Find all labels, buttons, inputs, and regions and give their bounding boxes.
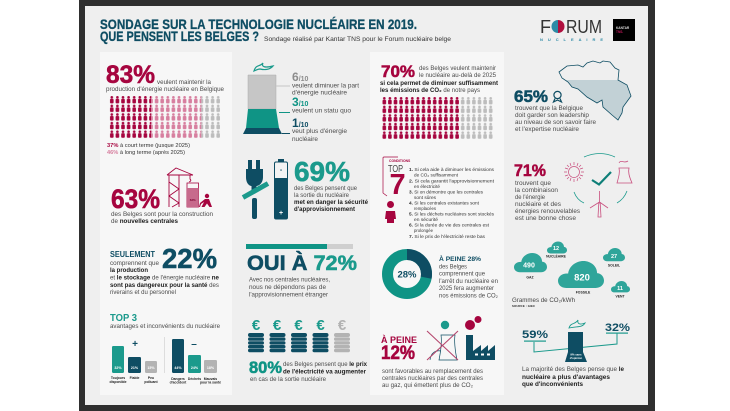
- subtitle: Sondage réalisé par Kantar TNS pour le Forum nucléaire belge: [264, 37, 452, 43]
- stat 32%: 32%: [605, 322, 630, 334]
- description: [294, 186, 369, 213]
- bar chart: drawbacks: Mauvais: [204, 377, 217, 381]
- icon: euro signs: €: [273, 317, 282, 334]
- list of conditions: remplacées: [414, 206, 437, 211]
- description: d'approvisionnement: [294, 207, 355, 213]
- list of conditions: [409, 167, 495, 239]
- description: centrales nucléaires par des centrales: [382, 376, 483, 382]
- bar chart: drawbacks: 18%: [207, 366, 215, 370]
- description: [111, 212, 213, 225]
- text 6/10: [292, 70, 359, 96]
- bar chart: advantages: Toujours: [111, 376, 125, 380]
- description: [439, 256, 499, 300]
- icon: plug: [243, 160, 268, 219]
- icon: euro signs: [252, 317, 347, 334]
- tower 9% sans opinion: [565, 332, 587, 362]
- list of conditions: 4. Si les centrales existantes sont: [409, 200, 480, 206]
- icon: coin stacks: [248, 333, 350, 352]
- description: nucléaire et des: [515, 202, 561, 208]
- bar chart: drawbacks: [170, 339, 221, 384]
- description: des Belges veulent maintenir: [419, 66, 496, 72]
- icon: euro signs: €: [338, 317, 347, 334]
- panel: 65% Belgian leadership: [514, 61, 631, 133]
- description: des Belges: [439, 264, 467, 270]
- cloud caption: Grammes de CO₂/kWh: [512, 298, 575, 304]
- description: des Belges sont pour la construction: [111, 212, 213, 218]
- stat 59%: 59%: [522, 329, 548, 341]
- description: des Belges pensent que le prix: [283, 362, 368, 368]
- icon: worker: [199, 194, 212, 207]
- description: À PEINE 28%: [439, 256, 482, 263]
- list of conditions: en sécurité: [414, 217, 438, 222]
- stat 12%: À PEINE: [381, 335, 417, 346]
- chart: cooling tower split: [243, 75, 282, 134]
- description: nous ne dépendons pas de: [249, 285, 327, 291]
- description: et le stockage de l'énergie nucléaire ne: [110, 276, 220, 282]
- text 3/10: [292, 95, 352, 114]
- heading seulement: SEULEMENT: [110, 250, 155, 259]
- bracket and heading: [383, 157, 411, 201]
- tower 9% sans opinion: 9% sans: [570, 352, 582, 356]
- panel: 70% beyond 2025: [380, 62, 498, 140]
- stat 12%: [381, 335, 417, 364]
- stat description: veulent maintenir la: [157, 80, 212, 86]
- list of conditions: 7. Si le prix de l'électricité reste bas: [409, 234, 486, 239]
- list of conditions: de CO₂ suffisamment: [414, 172, 459, 178]
- description: les émissions de CO₂ de notre pays: [380, 88, 480, 94]
- text 3/10: veulent un statu quo: [292, 108, 352, 114]
- description: que d'inconvénients: [522, 382, 584, 388]
- cloud wind 11: [611, 281, 630, 298]
- bar chart: advantages: polluant: [144, 380, 158, 384]
- description: au niveau de son savoir faire: [515, 120, 597, 126]
- text 1/10: [292, 116, 348, 143]
- bar chart: advantages: disponible: [110, 380, 127, 384]
- description: le nucléaire au-delà de 2025: [419, 73, 497, 79]
- description: au gaz, qui émettent plus de CO₂: [382, 383, 474, 389]
- list of conditions: 5. Si les déchets nucléaires sont stockés: [409, 212, 495, 216]
- cloud fossil 820: 820: [574, 272, 590, 284]
- panel: top 3: [110, 313, 221, 384]
- cloud nuclear 12: NUCLÉAIRE: [546, 254, 567, 258]
- sheet background: [85, 6, 648, 405]
- description: sont pas dangereux pour la santé des: [110, 283, 219, 289]
- bar chart: advantages: Fiable: [130, 376, 140, 380]
- description: met en danger la sécurité: [294, 200, 369, 206]
- description: trouvent que: [515, 181, 552, 187]
- description: [382, 369, 483, 389]
- tower 9% sans opinion: d'opinion: [570, 356, 583, 360]
- description: [250, 362, 368, 383]
- description: [515, 181, 580, 222]
- cloud gas 490: [514, 253, 547, 280]
- description: riverains et du personnel: [110, 290, 176, 296]
- icon: battery: +: [279, 210, 283, 217]
- description: sont favorables au remplacement des: [382, 369, 483, 375]
- description: la combinaison: [515, 188, 558, 194]
- icon: smoke: [569, 320, 585, 328]
- legend short and long term: [107, 143, 190, 156]
- stat 69%: 69%: [294, 156, 350, 187]
- stat description: production d'énergie nucléaire en Belgique: [106, 87, 225, 93]
- text 3/10: 3/10: [292, 95, 309, 109]
- logo: Forum Nucléaire: RUM: [566, 17, 602, 37]
- description: La majorité des Belges pense que le: [522, 367, 625, 373]
- description: si cela permet de diminuer suffisamment: [380, 81, 498, 87]
- list of conditions: 1. Si cela aide à diminuer les émissions: [409, 167, 495, 172]
- icon: factory: [465, 316, 495, 360]
- bar chart: advantages: 32%: [114, 366, 122, 370]
- cloud gas 490: GAZ: [526, 276, 534, 280]
- description: de nouvelles centrales: [111, 219, 179, 225]
- list of conditions: prolongée: [414, 228, 433, 233]
- panel: 22% safety: [110, 243, 220, 296]
- cloud nuclear 12: 12: [553, 246, 559, 252]
- list of conditions: 6. Si la durée de vie des centrales est: [409, 222, 490, 228]
- list of conditions: 3. Si on démontre que les centrales: [409, 190, 484, 194]
- icon: smoke: [254, 63, 273, 71]
- cloud caption: [512, 298, 575, 308]
- description: la production: [110, 268, 148, 274]
- icon: euro signs: €: [294, 317, 303, 334]
- stat 22%: 22%: [162, 243, 217, 274]
- description: en cas de la sortie nucléaire: [250, 377, 327, 383]
- icon: euro signs: €: [316, 317, 325, 334]
- cloud caption: SOURCE : GIEC: [512, 304, 535, 308]
- stat 63%: 63%: [111, 184, 160, 214]
- people pictogram 83%: [109, 96, 220, 139]
- panel: balance 59% vs 32%: [522, 320, 630, 388]
- map of Belgium: [559, 61, 631, 120]
- balance beam: [534, 333, 617, 352]
- icon: person: [385, 201, 396, 223]
- bar chart: drawbacks: Dangers: [171, 377, 185, 381]
- description: est une bonne chose: [515, 216, 577, 222]
- description: des Belges pensent que: [294, 186, 358, 192]
- description: de l'énergie: [515, 195, 546, 201]
- icon: battery: [274, 159, 288, 219]
- text 1/10: veut plus d'énergie: [292, 129, 348, 135]
- cloud wind 11: 11: [617, 286, 623, 292]
- description: l'arrêt du nucléaire en: [439, 279, 498, 285]
- description: [110, 261, 220, 296]
- cloud fossil 820: [558, 261, 604, 294]
- icon: battery: -: [280, 167, 283, 174]
- panel: 69% security of supply: [243, 156, 369, 219]
- title: SONDAGE SUR LA TECHNOLOGIE NUCLÉAIRE EN 2019.: [100, 16, 417, 32]
- text 6/10: d'énergie nucléaire: [292, 90, 348, 96]
- stat 65%: 65%: [514, 87, 548, 106]
- description: comprennent que: [110, 261, 160, 267]
- donut chart: 28%: [397, 270, 417, 280]
- bar chart: drawbacks: 24%: [191, 366, 199, 370]
- bar chart: advantages: 21%: [131, 366, 139, 370]
- icon: euro signs: €: [252, 317, 261, 334]
- panel: 63% new plants: [111, 168, 213, 225]
- bar chart: drawbacks: 44%: [174, 366, 182, 370]
- cloud nuclear 12: [546, 242, 567, 258]
- text 6/10: veulent diminuer la part: [292, 84, 359, 90]
- bar chart: drawbacks: –: [191, 339, 197, 350]
- description: nucléaire a plus d'avantages: [522, 375, 611, 381]
- cloud solar 27: 27: [611, 254, 617, 260]
- description: et l'expertise nucléaire: [515, 127, 580, 133]
- stat 70%: 70%: [381, 62, 415, 81]
- description: nos émissions de CO₂: [439, 294, 499, 300]
- heading oui à 72%: OUI À 72%: [247, 252, 357, 275]
- cloud solar 27: [603, 248, 625, 268]
- stat 80%: 80%: [249, 358, 282, 377]
- cloud gas 490: 490: [523, 262, 535, 270]
- description: [249, 278, 330, 298]
- subheading: avantages et inconvénients du nucléaire: [110, 324, 221, 330]
- icon: rosette: [554, 91, 562, 102]
- left column panel: [100, 52, 232, 395]
- description: énergies renouvelables: [515, 209, 580, 215]
- bar chart: drawbacks: d'accident: [170, 380, 187, 384]
- stat 83%: 83%: [106, 61, 155, 89]
- icon: crane: [167, 168, 193, 207]
- bar chart: advantages: [110, 339, 158, 384]
- people pictogram 70%: [382, 97, 494, 140]
- cloud fossil 820: FOSSILE: [576, 290, 591, 294]
- icon: pink tower: [617, 161, 632, 183]
- infographic page: [79, 0, 655, 411]
- logo: Kantar TNS: [613, 19, 635, 41]
- list of conditions: en électricité: [414, 184, 440, 189]
- panel: cooling tower 6/10 3/10 1/10: [243, 63, 359, 143]
- panel: top 7 conditions: [383, 157, 495, 239]
- panel: 83% maintain nuclear: [106, 61, 225, 156]
- description: trouvent que la Belgique: [515, 106, 584, 112]
- description: l'approvisionnement étranger: [249, 292, 328, 298]
- bar chart: advantages: +: [132, 339, 138, 350]
- heading: TOP 3: [110, 313, 137, 324]
- description: [515, 106, 597, 133]
- text 1/10: nucléaire: [292, 137, 319, 143]
- logo: Forum Nucléaire: NUCLEAIRE: [540, 37, 603, 42]
- bar chart: drawbacks: Déchets: [188, 377, 201, 381]
- stat description: [106, 80, 225, 93]
- description: la sortie du nucléaire: [294, 193, 350, 199]
- text 1/10: 1/10: [292, 116, 309, 130]
- bracket and heading: CONDITIONS: [389, 159, 411, 163]
- legend short and long term: 37% à court terme (jusque 2025): [107, 143, 190, 149]
- bracket and heading: 7: [390, 169, 406, 201]
- icon: crossed cooling tower: [427, 321, 458, 360]
- bar chart: advantages: 15%: [147, 366, 155, 370]
- bar chart: advantages: Peu: [148, 376, 154, 380]
- icon: circle arcs and check: [574, 154, 627, 203]
- description: de l'électricité va augmenter: [283, 370, 367, 376]
- bar chart: drawbacks: pour la santé: [200, 380, 221, 384]
- third column panel: [370, 52, 504, 395]
- description: Avec nos centrales nucléaires,: [249, 278, 330, 284]
- logo: Kantar TNS: KANTAR: [616, 26, 630, 30]
- cloud wind 11: VENT: [615, 294, 625, 298]
- cloud solar 27: SOLEIL: [608, 264, 620, 268]
- bracket and heading: TOP: [388, 163, 403, 175]
- list of conditions: 2. Si cela garantit l'approvisionnement: [409, 178, 495, 184]
- list of conditions: sont sûres: [414, 195, 437, 200]
- logo: Kantar TNS: TNS.: [616, 30, 623, 34]
- stat 71%: 71%: [514, 161, 546, 180]
- icon: silo 63%: 63%: [190, 198, 196, 202]
- icon: sun: [564, 162, 584, 182]
- description: doit garder son leadership: [515, 113, 590, 119]
- description: [522, 367, 625, 388]
- legend short and long term: 46% à long terme (après 2025): [107, 150, 185, 156]
- panel: 28% donut: [388, 254, 499, 300]
- panel: CO2 clouds: [512, 242, 630, 308]
- description: [380, 66, 498, 94]
- stat 12%: 12%: [381, 343, 415, 364]
- panel: oui à 72%: [246, 244, 357, 298]
- panel: 71% energy mix: [514, 154, 632, 222]
- logo: Forum Nucléaire: [540, 17, 603, 42]
- description: 2025 fera augmenter: [439, 286, 494, 292]
- title: QUE PENSENT LES BELGES ?: [100, 28, 259, 44]
- progress bar: [246, 244, 353, 249]
- description: comprennent que: [439, 272, 486, 278]
- panel: 80% electricity price: [248, 317, 368, 383]
- logo: Forum Nucléaire: F: [540, 17, 551, 37]
- icon: wind turbine: [590, 191, 608, 217]
- text 6/10: 6/10: [292, 70, 309, 84]
- panel: 12% gas replacement: [381, 316, 495, 389]
- outer dark frame: [79, 0, 655, 411]
- title: [100, 16, 417, 44]
